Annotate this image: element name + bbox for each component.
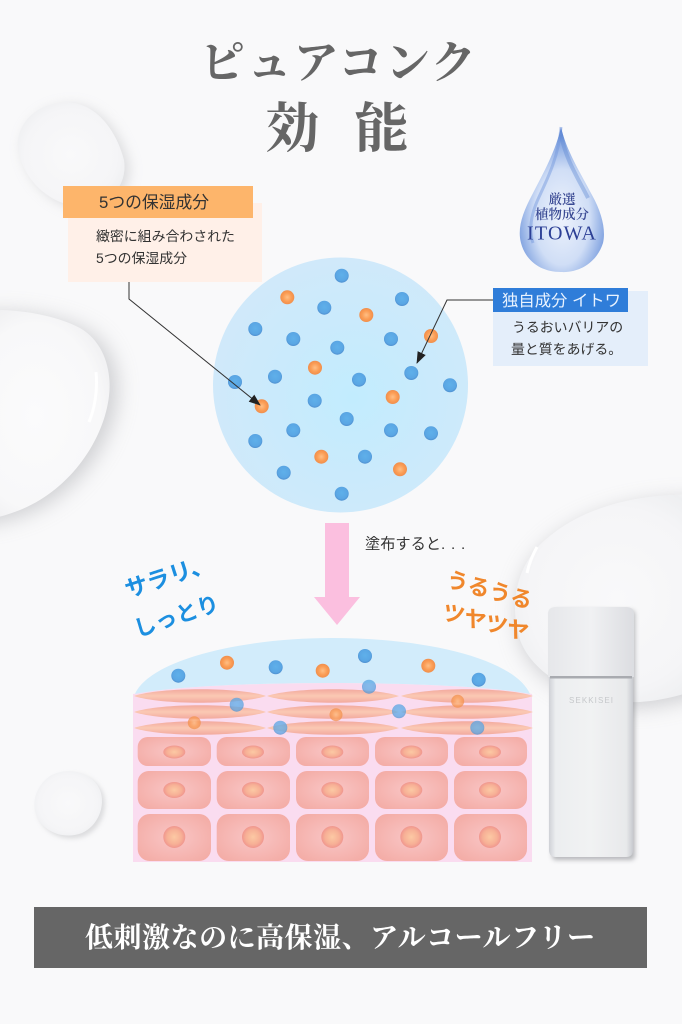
callout body [493,291,648,366]
flattened upper skin cells [134,689,533,735]
arrow: from five ingredients callout [129,282,260,405]
diagram: skin cross-section [133,638,533,862]
moisture film [135,638,530,694]
drop label: 植物成分 [535,206,589,222]
blue ingredient dots [228,269,457,501]
callout body [68,203,262,282]
callout heading: 5つの保湿成分 [99,193,209,212]
callout header [493,288,628,312]
diagram: ingredient circle [213,258,468,512]
text: plump and glossy [440,567,535,645]
banner text: 低刺激なのに高保湿、アルコールフリー [85,922,595,954]
callout description: 量と質をあげる。 [511,341,622,357]
arrow: from ITOWA callout [417,300,493,363]
arrow: application down arrow [314,523,360,625]
skin cells [138,737,527,861]
text: when applied: 塗布すると... [365,536,471,553]
cell nuclei [163,746,501,848]
bottle cap [548,607,634,677]
text: smooth and moist: しっとり [131,591,222,642]
drop label: 厳選 [548,192,577,207]
callout header [63,186,253,218]
callout: five moisturizing ingredients [63,186,262,282]
bottle body [549,677,633,857]
product bottle [548,607,635,860]
callout description: うるおいバリアの [512,319,623,335]
title line: product name: ピュアコンク [200,38,476,88]
water droplet: right large [515,494,682,707]
banner [34,907,647,968]
text: plump and glossy: うるうる [444,567,535,614]
text: smooth and moist [122,550,222,642]
brand mark: SEKKISEI [569,696,613,705]
title line: efficacy: 効 能 [266,99,408,159]
surface dots [171,649,486,687]
ITOWA wordmark: ITOWA [527,222,597,244]
callout description: 5つの保湿成分 [96,250,187,266]
callout heading: 独自成分 イトワ [502,292,621,310]
text: plump and glossy: ツヤツヤ [440,600,531,645]
water droplet: left large [0,310,118,525]
penetrating dots [188,680,484,735]
orange ingredient dots [255,290,438,476]
water droplet: top left [18,102,130,210]
title [200,38,476,159]
text: smooth and moist: サラリ、 [122,550,216,603]
icon: ITOWA water drop [520,127,604,272]
callout description: 緻密に組み合わされた [96,228,235,244]
skin base [133,683,532,862]
bottle shadow [552,610,635,860]
water droplet: bottom left [34,771,105,839]
callout: ITOWA [493,288,648,366]
